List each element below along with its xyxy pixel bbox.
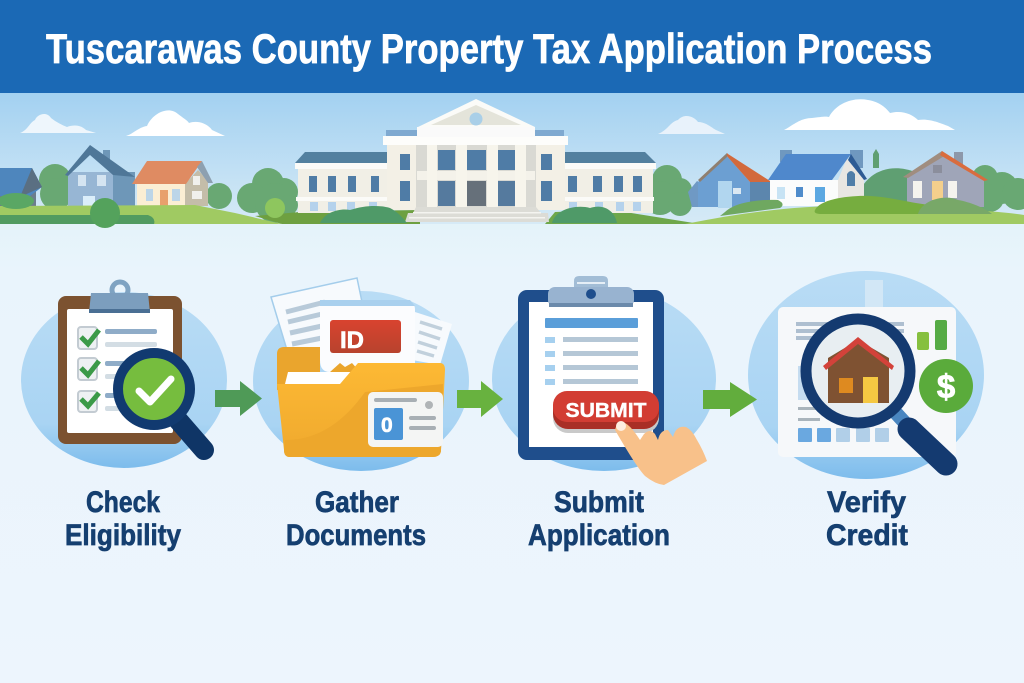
left wing (295, 152, 387, 213)
steps (405, 207, 549, 222)
title banner (0, 0, 1024, 93)
cloud 4 (784, 99, 955, 130)
arrow 1 (215, 381, 262, 416)
label: Check (86, 486, 160, 519)
centre block (383, 99, 568, 210)
icon: folder with documents: ID (340, 327, 364, 354)
step 3: submit application (492, 276, 716, 552)
house: orange roof (132, 161, 213, 206)
page background (0, 224, 1024, 683)
courthouse (295, 99, 656, 222)
scene: county landscape (0, 93, 1024, 228)
label: Submit (554, 486, 644, 519)
icon: clipboard with magnifier (21, 282, 227, 468)
shrubs (320, 206, 617, 223)
label: Application (528, 519, 670, 552)
icon: clipboard with submit button and hand (492, 276, 716, 485)
label: Verify (827, 486, 906, 519)
lawn (0, 193, 1024, 228)
icon: document with house magnifier and dollar (748, 271, 984, 479)
step 1: check eligibility (21, 282, 227, 552)
label (286, 486, 426, 552)
cloud 3 (658, 116, 725, 134)
house: blue with orange roof (688, 153, 770, 208)
icon: folder with documents: 0 (381, 414, 393, 437)
house: far left blue (0, 168, 42, 208)
cloud 2 (126, 110, 225, 136)
label: Gather (315, 486, 399, 519)
cloud 1 (20, 114, 96, 133)
trees left (39, 164, 298, 223)
house: blue gable (65, 145, 135, 206)
icon: document with house magnifier and dollar: $ (937, 368, 955, 405)
label (528, 486, 670, 552)
arrow 3 (703, 382, 757, 417)
icon: folder with documents (253, 278, 469, 471)
label: Eligibility (65, 519, 181, 552)
trees right (643, 149, 1024, 216)
label (826, 486, 908, 552)
label: Documents (286, 519, 426, 552)
arrow 2 (457, 381, 503, 417)
label: Credit (826, 519, 908, 552)
step 4: verify credit (748, 271, 984, 552)
label (65, 486, 181, 552)
right wing (564, 152, 656, 213)
house: grey with orange roof (903, 151, 988, 207)
step 2: gather documents (253, 278, 469, 552)
icon: clipboard with submit button and hand: SUBMIT (566, 400, 646, 422)
house: white with blue roof (768, 150, 867, 208)
